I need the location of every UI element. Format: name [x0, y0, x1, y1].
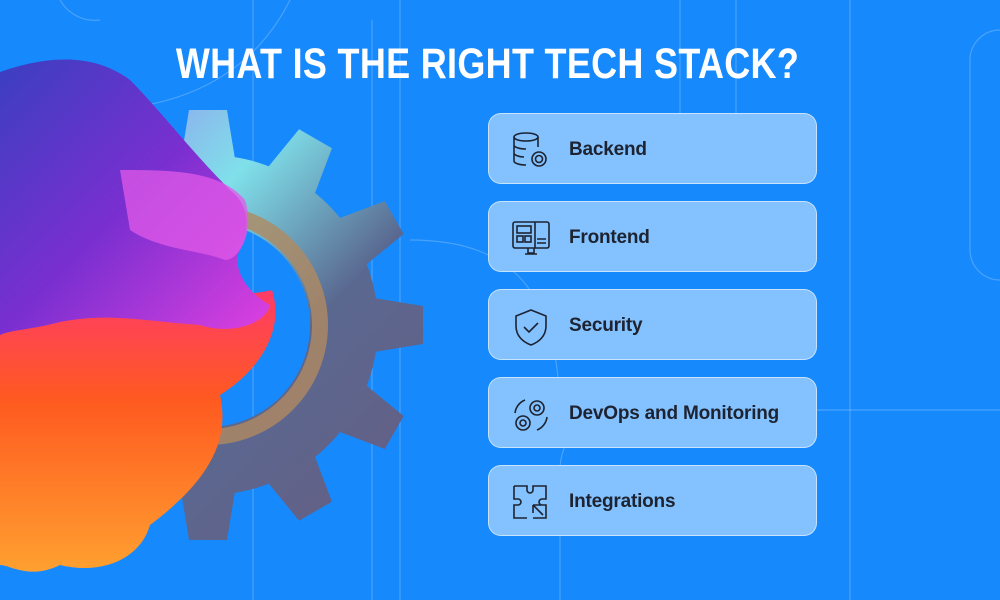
card: Backend: [488, 113, 817, 184]
icon: monitor: [512, 221, 550, 255]
icon: puzzle: [513, 485, 547, 519]
card: Security: Security: [569, 315, 642, 336]
card: Security: [488, 289, 817, 360]
card: Integrations: Integrations: [569, 491, 675, 512]
card: Integrations: [488, 465, 817, 536]
card: Backend: Backend: [569, 139, 647, 160]
icon: gears cycle: [514, 399, 548, 431]
icon: database gear: [513, 132, 547, 167]
card: DevOps and Monitoring: [488, 377, 817, 448]
icon: shield: [515, 309, 547, 346]
card: DevOps and Monitoring: DevOps and Monitoring: [569, 403, 779, 424]
card: Frontend: Frontend: [569, 227, 650, 248]
title: WHAT IS THE RIGHT TECH STACK?: [176, 39, 799, 88]
illustration: gear and fluid: [0, 60, 423, 572]
card: Frontend: [488, 201, 817, 272]
